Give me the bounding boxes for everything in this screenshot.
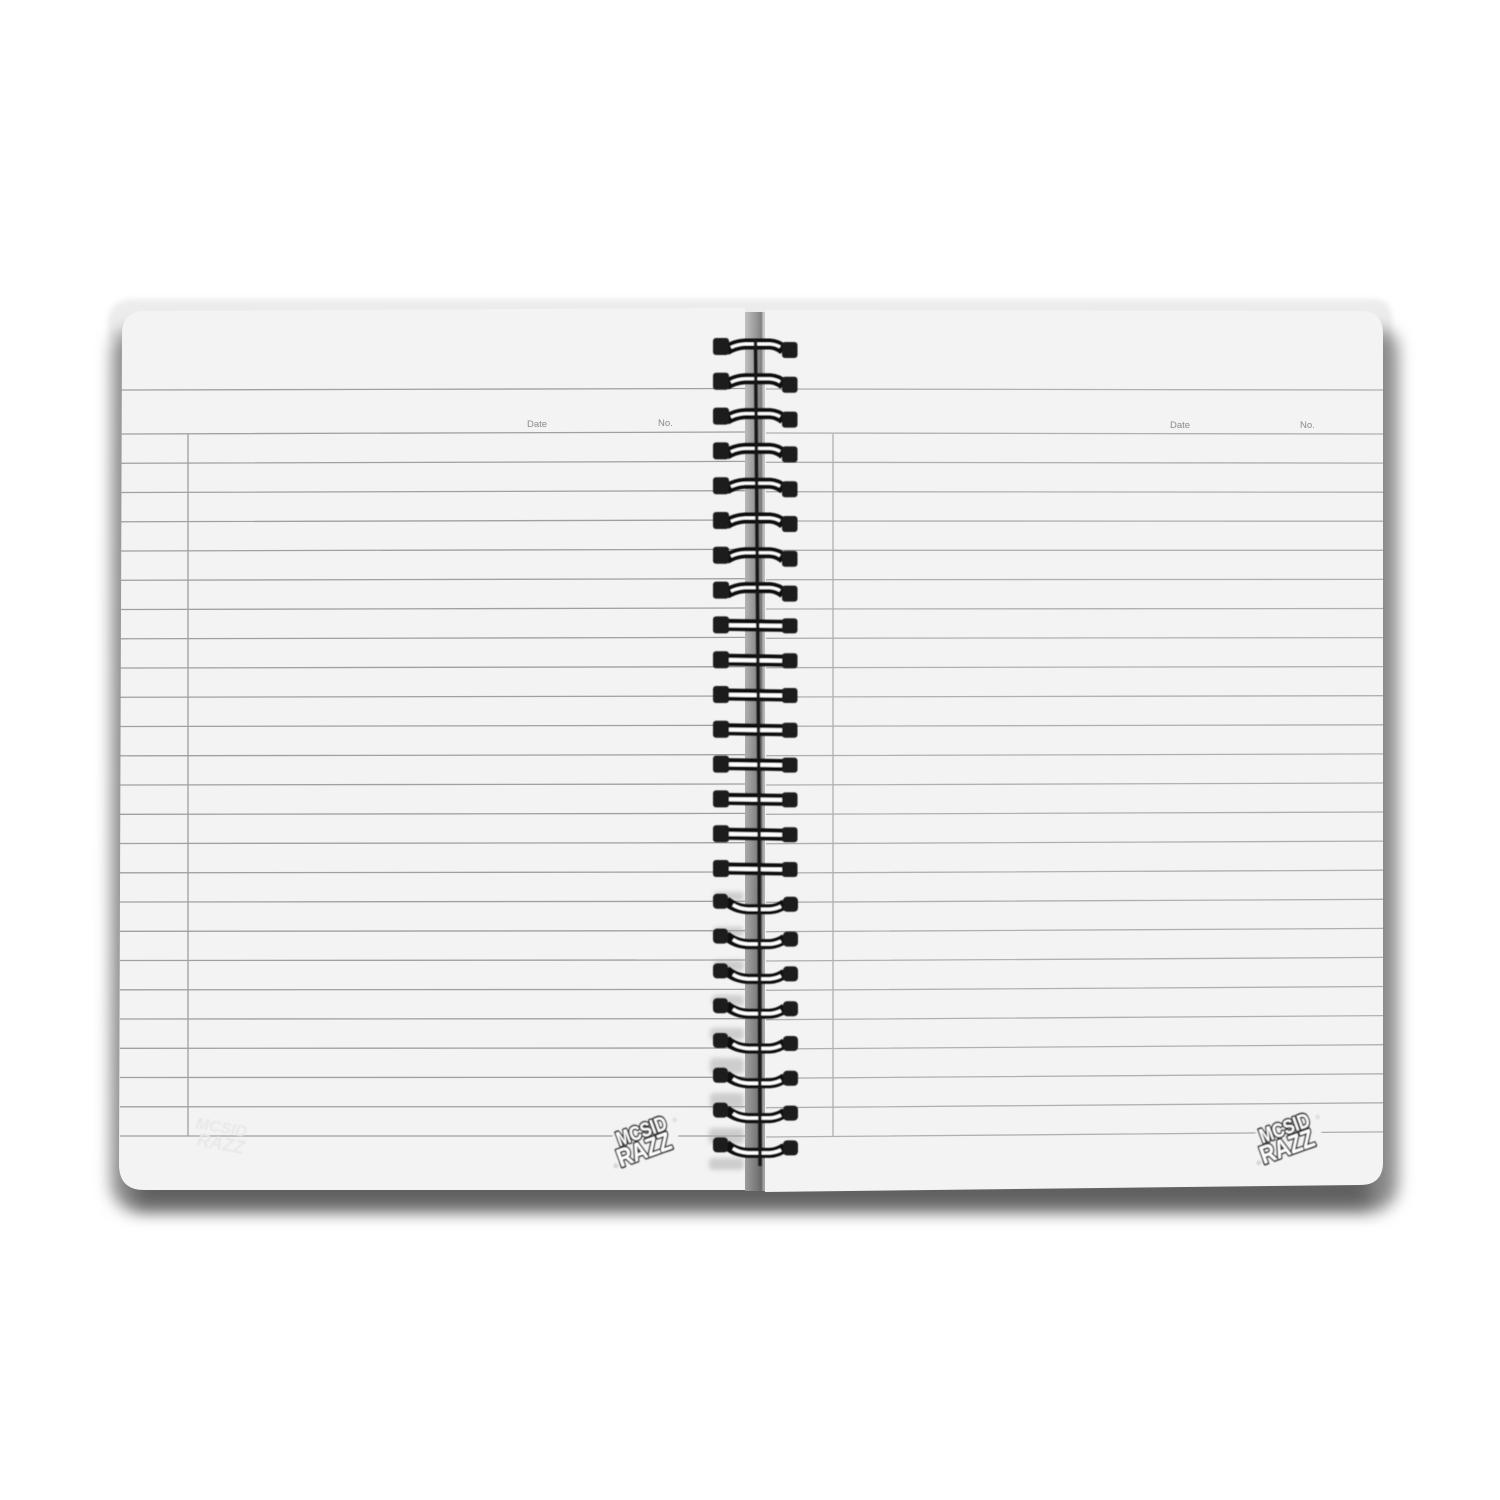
faint ghost logo: MCSID (194, 1115, 249, 1141)
faint ghost logo: RAZZ (195, 1130, 247, 1158)
left page ruled lines (120, 388, 745, 1136)
right page (765, 310, 1383, 1192)
left page logo: MCSID (614, 1113, 670, 1151)
right page logo: RAZZ (1256, 1124, 1318, 1170)
left number label: No. (658, 418, 673, 429)
right page logo: MCSID (1257, 1110, 1313, 1148)
ghost smear of lower rings (709, 892, 744, 1170)
spiral binding rings (713, 338, 798, 1166)
right page ruled lines (766, 389, 1383, 1137)
spine between the pages (745, 312, 766, 1191)
right number label: No. (1300, 420, 1315, 431)
left page logo (601, 1107, 688, 1175)
right page logo (1244, 1104, 1331, 1172)
right date label: Date (1170, 420, 1190, 431)
left page (119, 308, 745, 1190)
left date label: Date (527, 419, 547, 430)
faint ghost logo (191, 1115, 250, 1158)
notebook shadow (108, 299, 1398, 1212)
central wire (756, 340, 760, 1166)
left page logo: RAZZ (613, 1127, 675, 1173)
